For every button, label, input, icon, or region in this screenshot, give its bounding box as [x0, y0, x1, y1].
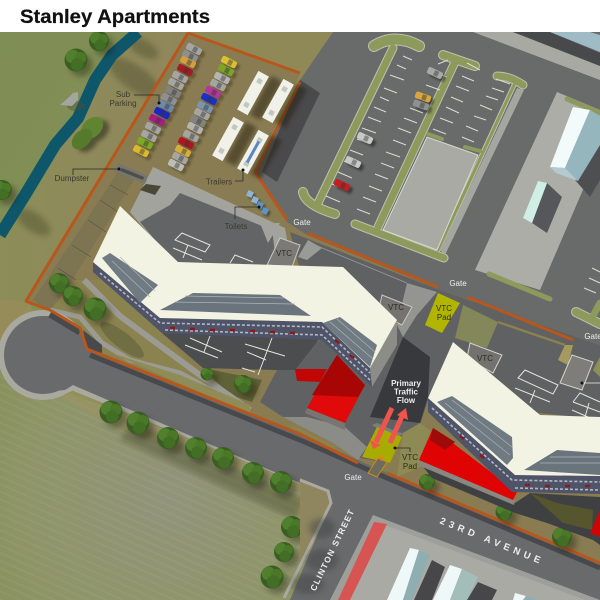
sub parking cars — [132, 42, 238, 172]
bush — [68, 112, 108, 153]
sub parking callout: Parking — [109, 99, 137, 108]
gate labels — [293, 218, 600, 482]
toilets callout: Toilets — [225, 222, 247, 231]
building shadow between wings — [370, 337, 430, 423]
parking stall lines — [326, 56, 600, 293]
large east concrete pad — [475, 92, 600, 290]
trailers — [212, 71, 294, 174]
lot cars on north road — [333, 66, 444, 192]
VTC pad, north: Pad — [437, 313, 451, 322]
upper right road strip and building — [473, 32, 600, 80]
asphalt patch below shadow — [372, 423, 403, 440]
building two — [428, 342, 600, 494]
dumpster callout — [55, 168, 120, 183]
red entrance canopy, building two — [419, 428, 517, 505]
sub parking callout — [109, 90, 160, 108]
concrete aprons and VTC boxes on drive — [267, 238, 600, 390]
hatched strip by west fence — [33, 172, 134, 313]
trailers callout — [206, 168, 244, 186]
site parking striping — [185, 336, 285, 375]
road name: 23rd Avenue: 23RD AVENUE — [438, 516, 546, 568]
statue — [60, 92, 85, 111]
primary traffic flow label — [391, 379, 421, 405]
building one — [93, 206, 397, 387]
lower grass field — [0, 298, 340, 600]
south dark lot — [162, 333, 320, 370]
concrete plaza in north lot — [383, 88, 524, 255]
VTC pad, south with gate — [362, 427, 402, 477]
east concrete pad median strips — [489, 99, 600, 299]
sub parking callout: Sub — [116, 90, 131, 99]
interior drive base asphalt — [260, 232, 600, 463]
gate labels: Gate — [344, 473, 362, 482]
road name: Clinton Street: CLINTON STREET — [308, 507, 357, 592]
VTC labels: VTC — [388, 303, 404, 312]
portable toilets — [246, 190, 269, 215]
primary traffic flow label: Primary — [391, 379, 421, 388]
VTC pad, north — [425, 293, 460, 333]
tan ground north of fence — [185, 32, 333, 82]
fence shadow hairline — [310, 243, 407, 283]
trailers callout: Trailers — [206, 178, 232, 186]
title: Stanley Apartments — [20, 7, 210, 28]
VTC north apron — [260, 223, 280, 243]
VTC labels: VTC — [477, 354, 493, 363]
right lot parking striping — [515, 370, 600, 417]
dirt patch beside VTC pad — [397, 423, 432, 477]
red entrance canopy, building one — [295, 355, 365, 430]
VTC pad callout — [394, 446, 418, 471]
large white warehouse — [550, 107, 600, 197]
asphalt: building one north lot — [130, 167, 292, 268]
parking shadow along east fence — [262, 80, 320, 182]
north parking road — [255, 32, 600, 345]
VTC labels: VTC — [276, 249, 292, 258]
south wing shadows — [420, 463, 600, 545]
corner block west of Clinton Street — [284, 478, 332, 598]
VTC pad callout: Pad — [403, 462, 417, 471]
dumpster callout: Dumpster — [55, 174, 90, 183]
tree shadows on grass — [11, 33, 300, 510]
walkways and landscape west of building one — [50, 280, 250, 414]
gate labels: Gate — [449, 279, 467, 288]
VTC labels — [276, 249, 493, 363]
dumpster — [115, 163, 161, 195]
north lot parking islands — [303, 40, 600, 324]
gate labels: Gate — [293, 218, 311, 227]
trailer logo — [246, 141, 260, 163]
primary traffic flow label: Flow — [397, 396, 416, 405]
toilets callout — [225, 206, 260, 231]
VTC pad callout: VTC — [402, 453, 418, 462]
concrete strip near gate — [283, 417, 367, 460]
small pale warehouse — [523, 181, 562, 233]
right lot callout — [580, 382, 600, 384]
river — [0, 32, 138, 235]
primary traffic flow label: Traffic — [394, 388, 419, 396]
lower right lot — [330, 515, 600, 600]
title band — [0, 0, 600, 32]
south grass patch — [203, 368, 262, 402]
dirt strip between river and fence — [0, 32, 188, 300]
fence shadow along road — [50, 314, 600, 568]
lower cul-de-sac and 23rd Avenue — [0, 310, 600, 600]
primary traffic flow arrows — [370, 408, 408, 449]
red block at right edge — [590, 510, 600, 537]
VTC pad, north: VTC — [436, 304, 452, 313]
tree shadows on Clinton Street — [292, 518, 338, 594]
